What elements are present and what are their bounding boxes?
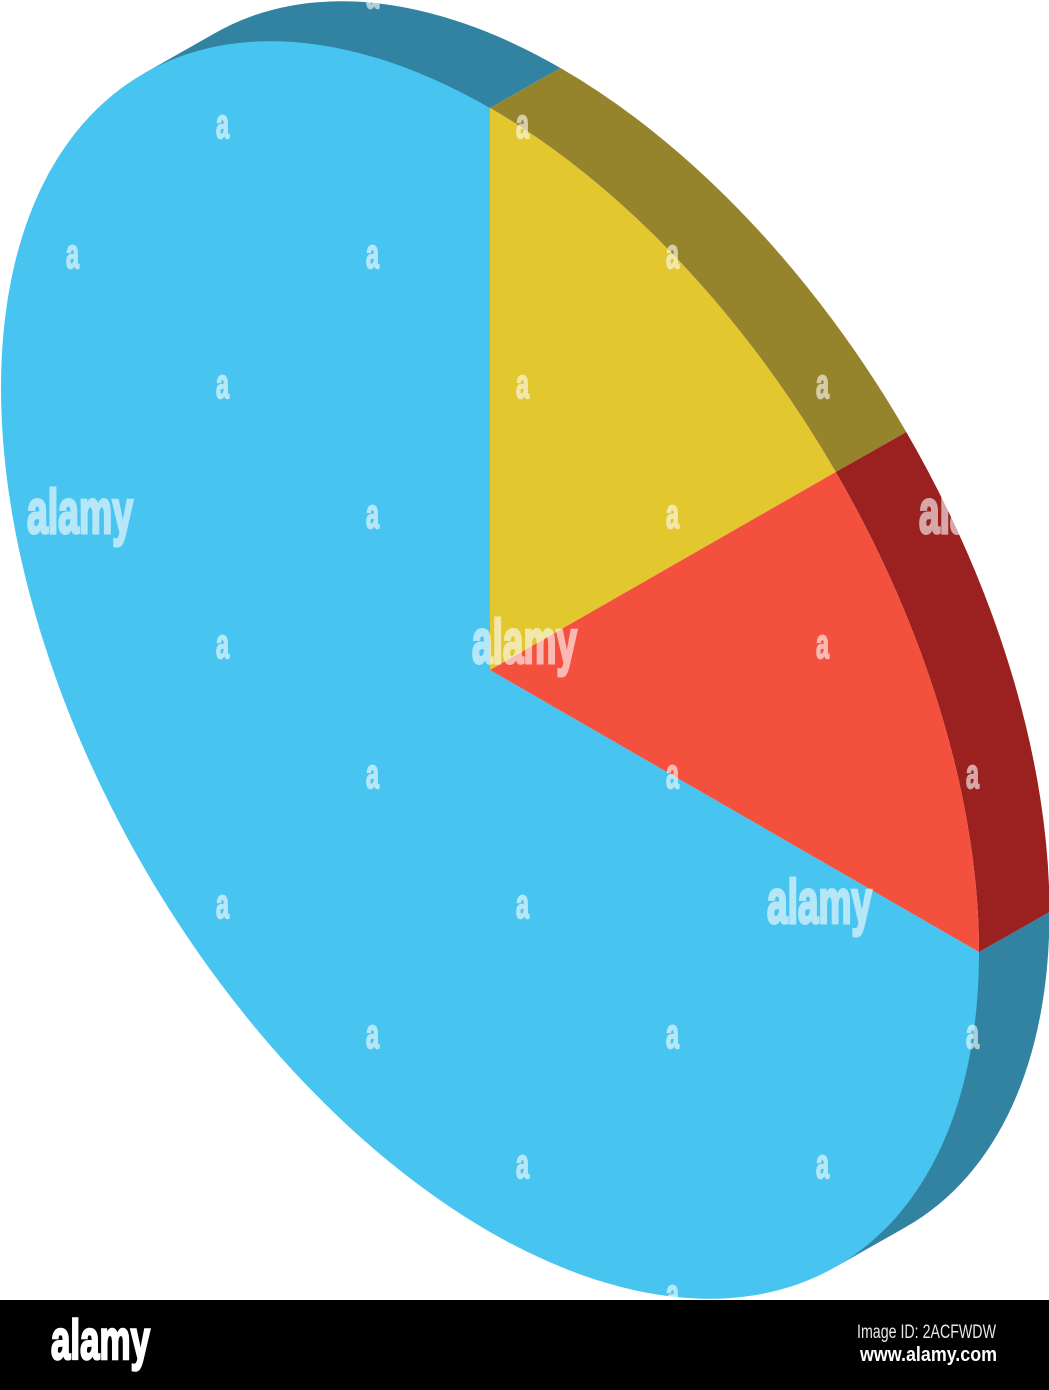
side wall: dark red [836, 391, 1049, 993]
watermark logos: alamy [767, 868, 872, 937]
watermark tiles: a [666, 1270, 679, 1317]
watermark tiles: a [966, 1010, 979, 1057]
footer bar [0, 1300, 1049, 1390]
watermark tiles: a [816, 1140, 829, 1187]
watermark tiles: a [666, 490, 679, 537]
watermark tiles: a [966, 750, 979, 797]
watermark tiles: a [666, 750, 679, 797]
watermark tiles: a [666, 1010, 679, 1057]
watermark tiles: a [216, 880, 229, 927]
website: www.alamy.com [859, 1344, 997, 1366]
watermark tiles: a [516, 360, 529, 407]
watermark tiles: a [366, 1010, 379, 1057]
watermark tiles: a [216, 360, 229, 407]
watermark logos [27, 478, 1024, 937]
watermark tiles: a [216, 620, 229, 667]
watermark tiles: a [666, 230, 679, 277]
watermark tiles: a [516, 100, 529, 147]
footer logo: alamy [51, 1308, 150, 1371]
watermark tiles: a [816, 360, 829, 407]
watermark tiles: a [516, 1140, 529, 1187]
slice: yellow [490, 108, 836, 869]
watermark tiles: a [66, 230, 79, 277]
watermark tiles: a [366, 230, 379, 277]
watermark logos: alamy [27, 478, 133, 547]
side wall: blue upper [144, 0, 561, 313]
slice: red [490, 273, 979, 952]
watermark tiles: a [816, 620, 829, 667]
watermark tiles: a [366, 490, 379, 537]
side wall: blue lower [836, 789, 1049, 1390]
image id: Image ID: 2ACFWDW [857, 1322, 996, 1343]
watermark tiles: a [366, 750, 379, 797]
watermark tiles: a [516, 880, 529, 927]
watermark logos: alamy [472, 608, 577, 677]
side wall: olive [490, 27, 906, 513]
watermark tiles: a [216, 100, 229, 147]
